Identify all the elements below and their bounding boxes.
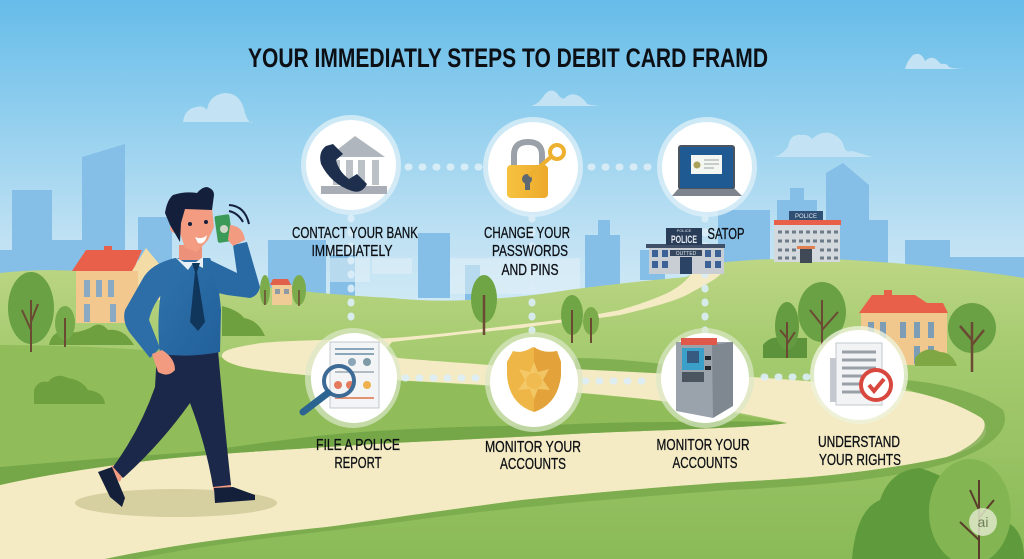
watermark: ai <box>978 514 988 530</box>
background sky <box>0 0 1024 340</box>
smile <box>195 235 207 243</box>
label: file a police report <box>316 437 400 472</box>
right buildings and trees <box>763 211 996 372</box>
raised arm <box>210 242 260 298</box>
label: monitor accounts 2: MONITOR YOUR <box>656 437 750 454</box>
label: monitor accounts 2 <box>656 437 750 472</box>
bottom right tree and bushes <box>852 459 1024 559</box>
icon: police badge <box>507 347 561 412</box>
label: contact your bank <box>292 225 418 260</box>
label: file a police report: FILE A POLICE <box>316 437 400 454</box>
step 1: contact your bank <box>301 115 401 215</box>
right buildings and trees: POLICE <box>795 214 817 220</box>
label: change passwords: CHANGE YOUR <box>484 225 570 242</box>
label: understand rights <box>818 434 901 469</box>
dotted connectors <box>351 167 810 381</box>
hair <box>165 187 214 242</box>
police station <box>646 228 725 274</box>
head <box>180 208 214 252</box>
icon: bank with phone <box>320 136 387 194</box>
label: monitor accounts 1 <box>485 439 581 473</box>
step 2: change passwords <box>483 117 583 217</box>
icon: padlock and key <box>507 142 564 198</box>
mid trees <box>471 275 599 343</box>
neck <box>179 245 202 260</box>
police station: POLICE <box>677 228 692 233</box>
step 7: understand rights <box>810 326 908 424</box>
step 6: monitor accounts (ATM) <box>656 328 754 428</box>
icon: report and magnifier <box>303 342 379 412</box>
body <box>158 258 221 356</box>
winding path <box>0 273 986 559</box>
small house <box>270 279 292 305</box>
phone <box>214 214 233 243</box>
clouds <box>183 54 970 157</box>
label: contact your bank: IMMEDIATELY <box>312 243 393 260</box>
hand at hip <box>152 350 175 375</box>
left shoe <box>98 467 125 507</box>
lowered arm <box>124 258 175 358</box>
hills <box>0 259 1024 559</box>
ankles <box>108 465 231 490</box>
collar <box>175 257 203 270</box>
label: understand rights: YOUR RIGHTS <box>819 452 901 469</box>
left house <box>72 246 160 323</box>
label: satop: SATOP <box>708 226 744 243</box>
step 4: file a police report <box>303 328 401 428</box>
label: monitor accounts 1: ACCOUNTS <box>500 456 566 473</box>
label: change passwords <box>484 225 570 279</box>
icon: laptop <box>672 146 742 196</box>
step 3: laptop <box>657 117 757 217</box>
ground shadow <box>75 489 277 517</box>
label: change passwords: PASSWORDS <box>492 243 568 260</box>
tie <box>190 263 205 331</box>
trousers <box>113 350 231 487</box>
label: understand rights: UNDERSTAND <box>818 434 900 451</box>
person walking with phone <box>98 187 260 507</box>
title: YOUR IMMEDIATLY STEPS TO DEBIT CARD FRAMD <box>248 43 768 73</box>
city skyline <box>0 144 1024 307</box>
police station: POLICE <box>671 234 697 246</box>
label: file a police report: REPORT <box>334 455 382 472</box>
left lower meadow and island <box>0 345 787 485</box>
label: contact your bank: CONTACT YOUR BANK <box>292 225 418 242</box>
phone hand <box>228 225 245 246</box>
police station: OUTTED <box>676 251 697 257</box>
step 5: monitor accounts (badge) <box>485 332 583 432</box>
label: change passwords: AND PINS <box>502 262 558 279</box>
label: monitor accounts 1: MONITOR YOUR <box>485 439 581 456</box>
signal arcs <box>229 205 249 224</box>
right shoe <box>214 487 255 503</box>
left bushes and trees <box>8 272 306 404</box>
icon: ATM <box>676 338 733 418</box>
icon: document with check <box>830 343 891 405</box>
path shading <box>0 358 1005 559</box>
pale haze buildings <box>330 258 580 294</box>
label: monitor accounts 2: ACCOUNTS <box>672 455 738 472</box>
